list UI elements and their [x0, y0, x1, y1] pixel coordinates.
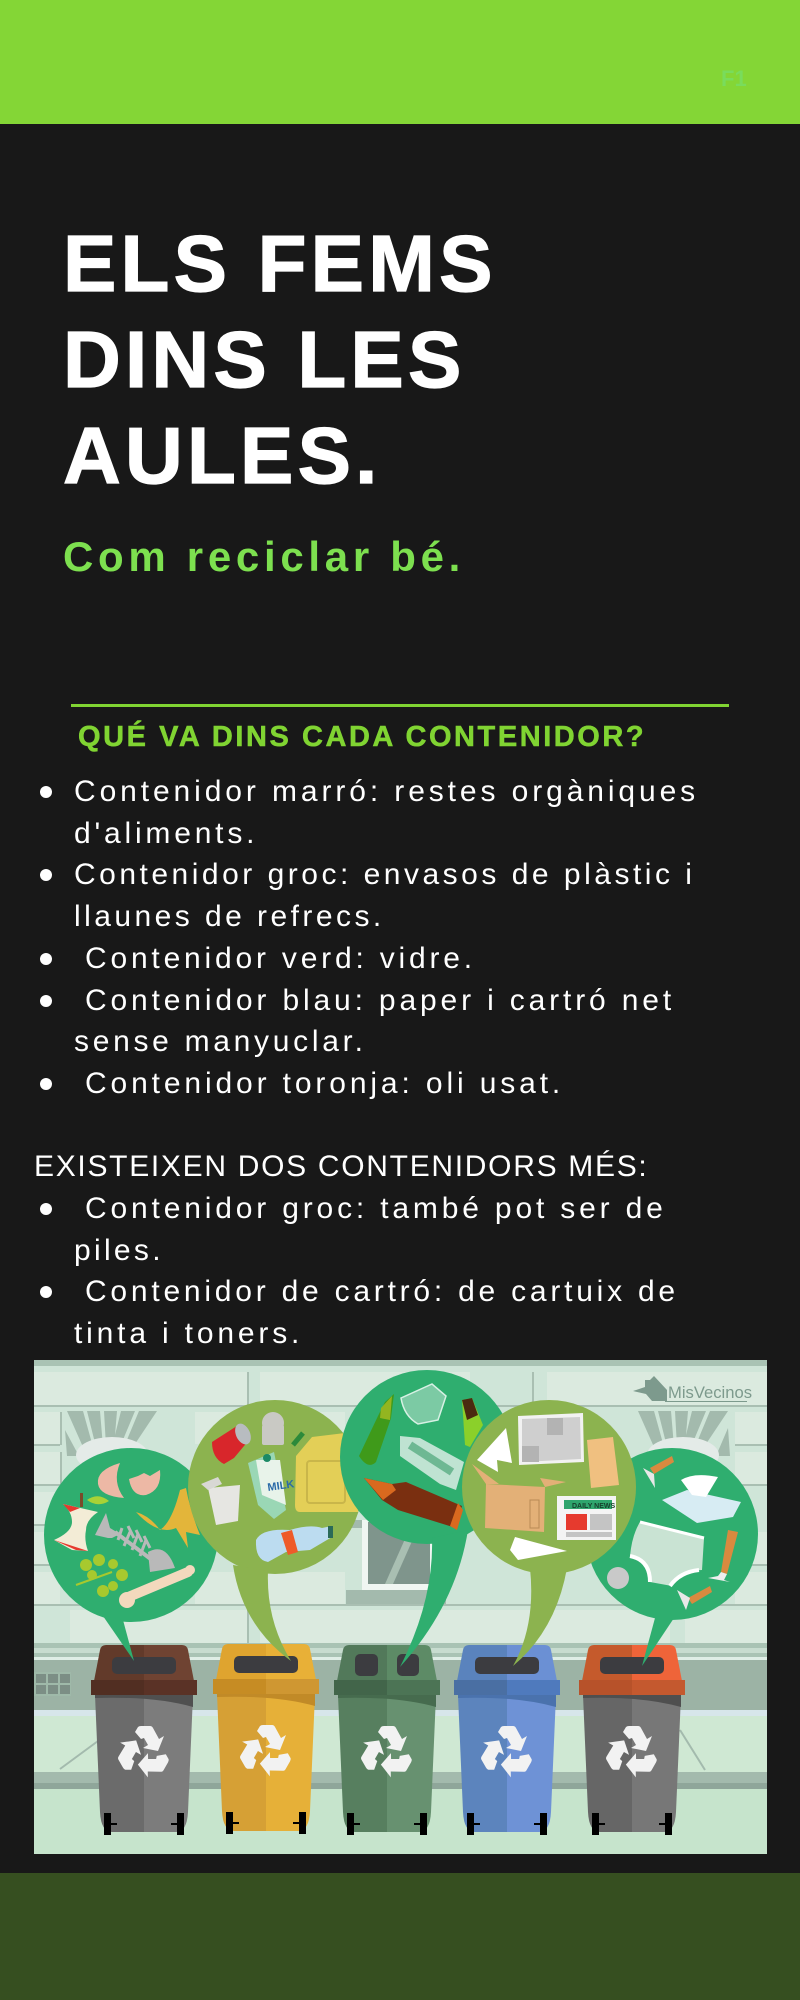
- vent right: [638, 1411, 730, 1473]
- bone: [119, 1565, 195, 1608]
- logo MisVecinos: [633, 1376, 752, 1402]
- yogurt cup: [201, 1477, 240, 1525]
- title: [63, 219, 497, 500]
- eggshells: [98, 1463, 160, 1498]
- bullet: contenidor blau: Contenidor blau: paper i cartró net: [85, 984, 675, 1016]
- subtitle: Com reciclar bé.: [63, 533, 465, 580]
- bin: yellow: [213, 1644, 319, 1834]
- bullet: contenidor groc piles: piles.: [74, 1234, 164, 1267]
- cardboard box: [472, 1464, 566, 1532]
- title: AULES.: [63, 411, 382, 500]
- bin: green: [334, 1645, 440, 1835]
- newspaper sheet: [518, 1413, 584, 1465]
- plastic bottle: [256, 1526, 333, 1562]
- bullet: contenidor groc: Contenidor groc: envasos de plàstic i: [74, 858, 695, 891]
- bin: orange: [579, 1645, 685, 1835]
- vent left: [65, 1411, 157, 1473]
- tissue box: [662, 1475, 741, 1523]
- bullet: contenidor blau: sense manyuclar.: [74, 1025, 367, 1058]
- paper plane 2: [510, 1537, 567, 1560]
- section heading: QUÉ VA DINS CADA CONTENIDOR?: [78, 721, 646, 753]
- bullet: contenidor groc piles: Contenidor groc: també pot ser de: [85, 1192, 667, 1225]
- street, wall base and pavement: [34, 1643, 767, 1854]
- bubble: plastics and cans: [188, 1400, 362, 1661]
- envelope: [587, 1437, 619, 1488]
- bullet: contenidor de cartró: tinta i toners.: [74, 1317, 303, 1350]
- cigarette right: [708, 1530, 738, 1582]
- bin: brown: [91, 1645, 197, 1835]
- bullet: contenidor verd: Contenidor verd: vidre.: [85, 942, 476, 975]
- bubble: right green waste: [586, 1448, 758, 1666]
- illustration: recycling bins with speech bubbles: [34, 1360, 767, 1854]
- small bottle: [462, 1398, 483, 1447]
- page code F1: F1: [721, 66, 747, 91]
- glass jar: [401, 1384, 446, 1424]
- yellow jug: [293, 1433, 358, 1512]
- milk carton: MILK: [267, 1478, 295, 1494]
- bubble: paper and cardboard: [462, 1400, 636, 1666]
- brown bottle: [364, 1478, 463, 1530]
- stacked lids: [262, 1412, 284, 1445]
- window: [346, 1520, 450, 1604]
- crushed can: [212, 1421, 254, 1464]
- bullet: contenidor marró: d'aliments.: [74, 817, 258, 850]
- green bottle: [359, 1394, 394, 1465]
- logo MisVecinos: MisVecinos: [668, 1383, 752, 1402]
- bullet: contenidor marró: Contenidor marró: restes orgàniques: [74, 775, 699, 808]
- banana peel: [136, 1488, 200, 1548]
- title: ELS FEMS: [63, 219, 497, 308]
- bullet: contenidor de cartró: [40, 1275, 679, 1350]
- bullet: contenidor groc: [40, 858, 695, 933]
- cigarette bottom: [677, 1586, 712, 1610]
- diaper: [630, 1522, 704, 1586]
- divider line: [71, 704, 729, 707]
- herb leaves: [76, 1554, 128, 1597]
- paper plane: [477, 1428, 512, 1472]
- bullet: contenidor groc: llaunes de refrecs.: [74, 900, 385, 933]
- newspaper daily news: DAILY NEWS: [572, 1503, 616, 1510]
- text: existeixen dos contenidors més: EXISTEIXEN DOS CONTENIDORS MÉS:: [34, 1150, 648, 1183]
- clear bottle: [400, 1436, 464, 1490]
- apple core: [54, 1493, 109, 1551]
- bullet: contenidor groc piles: [40, 1192, 667, 1267]
- newspaper daily news: [557, 1496, 616, 1540]
- bullet: contenidor marró: [40, 775, 699, 850]
- header band: [0, 0, 800, 124]
- cigarette butt top: [643, 1456, 674, 1488]
- milk carton: [248, 1452, 295, 1519]
- fish skeleton: [95, 1513, 175, 1572]
- bubble: glass: [340, 1370, 514, 1667]
- footer band: [0, 1873, 800, 2000]
- bubble: organic waste: [44, 1448, 218, 1661]
- bullet: contenidor blau: [40, 984, 675, 1058]
- title: DINS LES: [63, 315, 466, 404]
- bullet: contenidor de cartró: Contenidor de cartró: de cartuix de: [85, 1275, 679, 1308]
- bullet: contenidor toronja: Contenidor toronja: oli usat.: [85, 1067, 564, 1100]
- bin: blue: [454, 1645, 560, 1835]
- wall background: [34, 1360, 767, 1650]
- crumpled paper: [607, 1567, 629, 1589]
